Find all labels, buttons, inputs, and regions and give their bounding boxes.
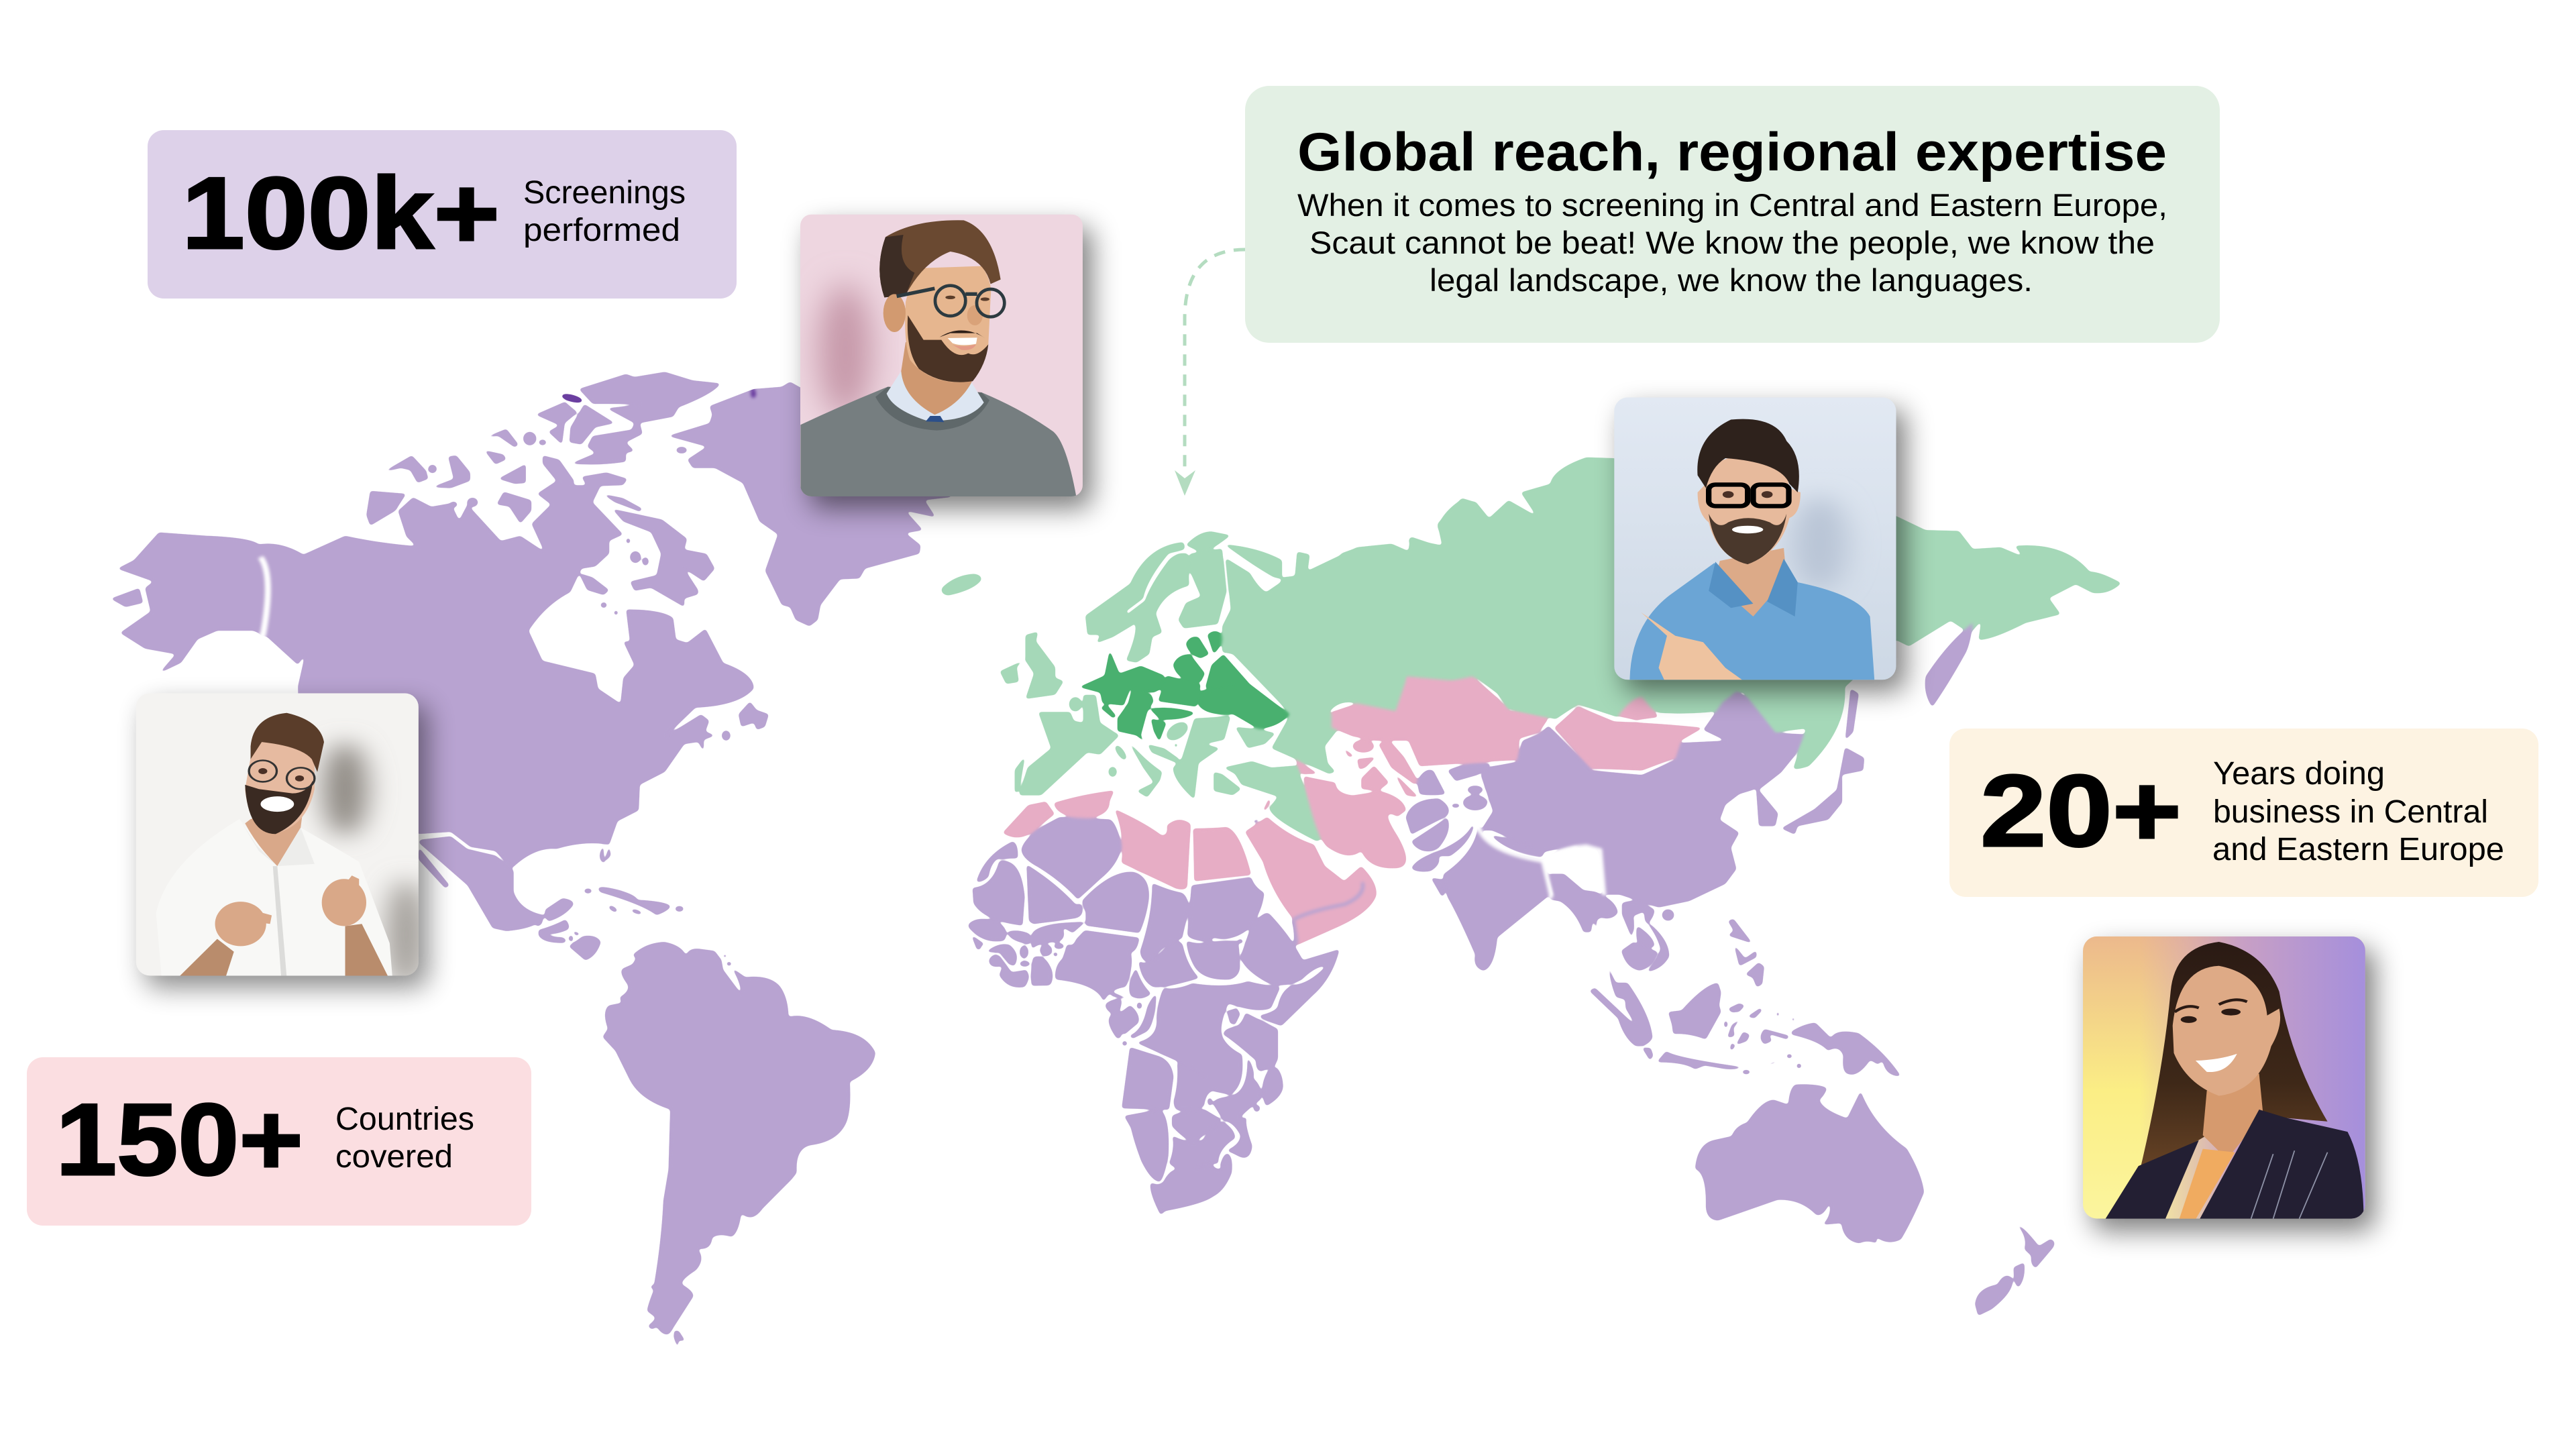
map region: Middle East, pink [1245,740,1419,945]
world map [111,372,2121,1350]
stat card: 150+ countries: covered [335,1139,453,1175]
stat card: 20+ years: and Eastern Europe [2212,832,2504,867]
photo: man pointing, white shirt [136,693,428,990]
map region: Greenland [667,382,1012,627]
Central Asia and Mongolia, pink [1332,676,1703,771]
callout: Global reach, regional expertise: When it comes to screening in Central and Eastern Europe, [1297,187,2167,223]
map region: Central and Eastern Europe, dark green [1079,631,1289,745]
photo: woman, yellow and purple background [2083,936,2375,1231]
stat card: 20+ years: 20+ [1980,754,2182,868]
stat card: 150+ countries: Countries [335,1102,474,1137]
photo: man with round glasses, pink background [800,215,1092,508]
stat card: 100k+ screenings [148,130,737,299]
callout: Global reach, regional expertise: legal landscape, we know the languages. [1430,262,2033,298]
photo: man with black glasses, blue shirt [1614,397,1906,692]
map region: Russia, Scaut regional area [1339,458,2121,769]
stat card: 100k+ screenings: performed [523,213,680,248]
stat card: 100k+ screenings: 100k+ [182,156,500,270]
stat card: 20+ years: Years doing [2213,756,2385,792]
map region: Caribbean and Central America [537,887,684,961]
callout: Global reach, regional expertise: Global reach, regional expertise [1297,122,2167,182]
map region: Southeast Asia and Oceania [1549,873,2055,1316]
stat card: 150+ countries [27,1057,531,1226]
stat card: 20+ years: business in Central [2213,794,2488,830]
map region: Africa [968,790,1340,1216]
Sub-Saharan Africa, purple [968,817,1340,1216]
arrow: from callout to Europe [1175,250,1245,496]
callout: Global reach, regional expertise [1245,86,2220,343]
China, India and East Asia, purple [1405,623,1973,971]
map region: Asia [1332,623,1973,971]
map region: South America [602,942,875,1350]
stat card: 100k+ screenings: Screenings [523,175,686,211]
map region: North America [111,372,769,931]
map region: Europe, green countries [941,498,1476,841]
North Africa, pink [1002,790,1251,890]
stat card: 150+ countries: 150+ [56,1083,303,1197]
stat card: 20+ years [1949,729,2538,897]
callout: Global reach, regional expertise: Scaut cannot be beat! We know the people, we know the [1309,225,2155,260]
